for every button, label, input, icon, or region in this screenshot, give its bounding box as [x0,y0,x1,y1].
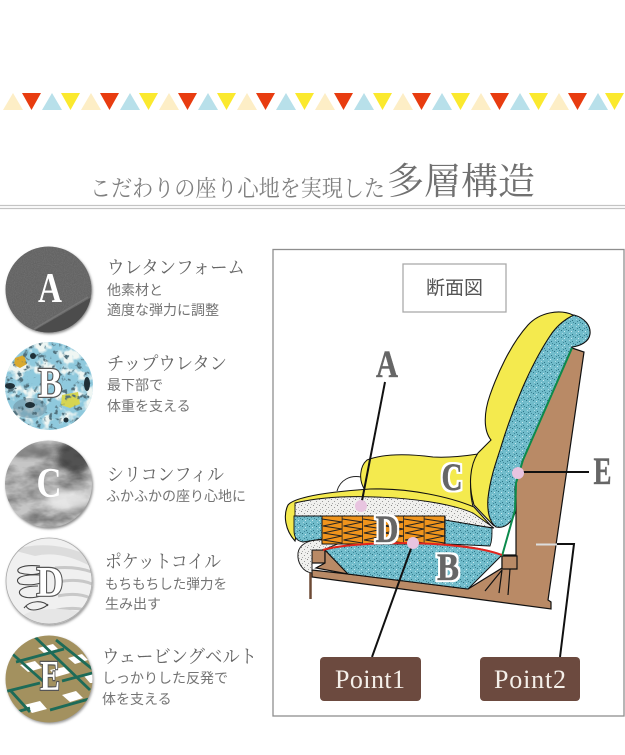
callout letters: B [437,546,459,589]
layer C: back yellow cushion [471,312,573,525]
text: chip urethane: 体重を支える [107,398,191,414]
material A: urethane foam: A [38,266,63,312]
seat side white loop [337,477,361,491]
text: webbing belt: ウェービングベルト [102,647,257,668]
leader line A [361,382,385,506]
layer: white foam under seat [298,540,345,573]
text: webbing belt [102,647,257,707]
text: chip urethane: チップウレタン [107,354,227,375]
marker A [355,500,367,512]
text: urethane foam: ウレタンフォーム [107,259,245,279]
title: 多層構造 [387,161,535,203]
material E: webbing belt: E [40,654,60,700]
button: Point 1 [320,657,421,701]
text: urethane foam [107,259,245,318]
text: silicone fill [106,466,246,504]
text: silicone fill: シリコンフィル [107,466,224,486]
panel: cross-section diagram [273,250,624,716]
material A: urethane foam [5,246,95,335]
text: pocket coil: ポケットコイル [105,553,221,573]
sofa frame: back and base [310,348,584,609]
text: silicone fill: ふかふかの座り心地に [106,488,246,504]
button: Point 2 [480,657,580,701]
text: pocket coil: 生み出す [105,596,161,612]
button: Point 1: Point1 [335,665,405,694]
leader line E [518,471,589,473]
title: こだわりの座り心地を実現した [90,176,385,201]
material E: webbing belt [4,636,96,724]
layer D: pocket coil springs [322,516,445,544]
material B: chip urethane: B [38,361,62,407]
button: Point 2: Point2 [494,665,566,694]
material C: silicone fill: C [36,461,62,507]
seat cushion: yellow cover [285,489,492,541]
callout letters: D [376,508,398,551]
layer B: chip urethane base [325,543,502,589]
title [90,161,535,203]
red line [323,543,502,555]
layer E: green webbing line [502,348,572,556]
material D: pocket coil [6,538,94,626]
text: urethane foam: 他素材と [107,282,163,298]
marker B [407,537,419,549]
callout letters: A [376,343,398,386]
text: chip urethane: 最下部で [107,377,163,393]
layer A: urethane foam [295,497,494,528]
bunting triangles [3,93,624,110]
material B: chip urethane [5,342,93,430]
layer C: back lumbar cushion [361,454,478,510]
material C: silicone fill [5,440,93,529]
text: pocket coil: もちもちした弾力を [105,576,227,592]
text: urethane foam: 適度な弾力に調整 [107,302,219,318]
label: cross-section heading: 断面図 [426,277,483,299]
label: cross-section heading [403,264,506,312]
leader line B to Point 1 [372,543,413,657]
text: webbing belt: 体を支える [102,691,172,707]
callout letters: C [442,456,462,499]
marker E [512,467,524,479]
text: chip urethane [107,354,227,414]
layer: back chip urethane [488,315,590,527]
text: pocket coil [105,553,227,612]
callout letters [376,343,612,589]
seat blue chip layers [294,516,492,546]
text: webbing belt: しっかりした反発で [102,670,228,686]
callout letters: E [594,450,612,493]
leader line to Point 2 [536,544,574,657]
material D: pocket coil: D [36,560,64,606]
